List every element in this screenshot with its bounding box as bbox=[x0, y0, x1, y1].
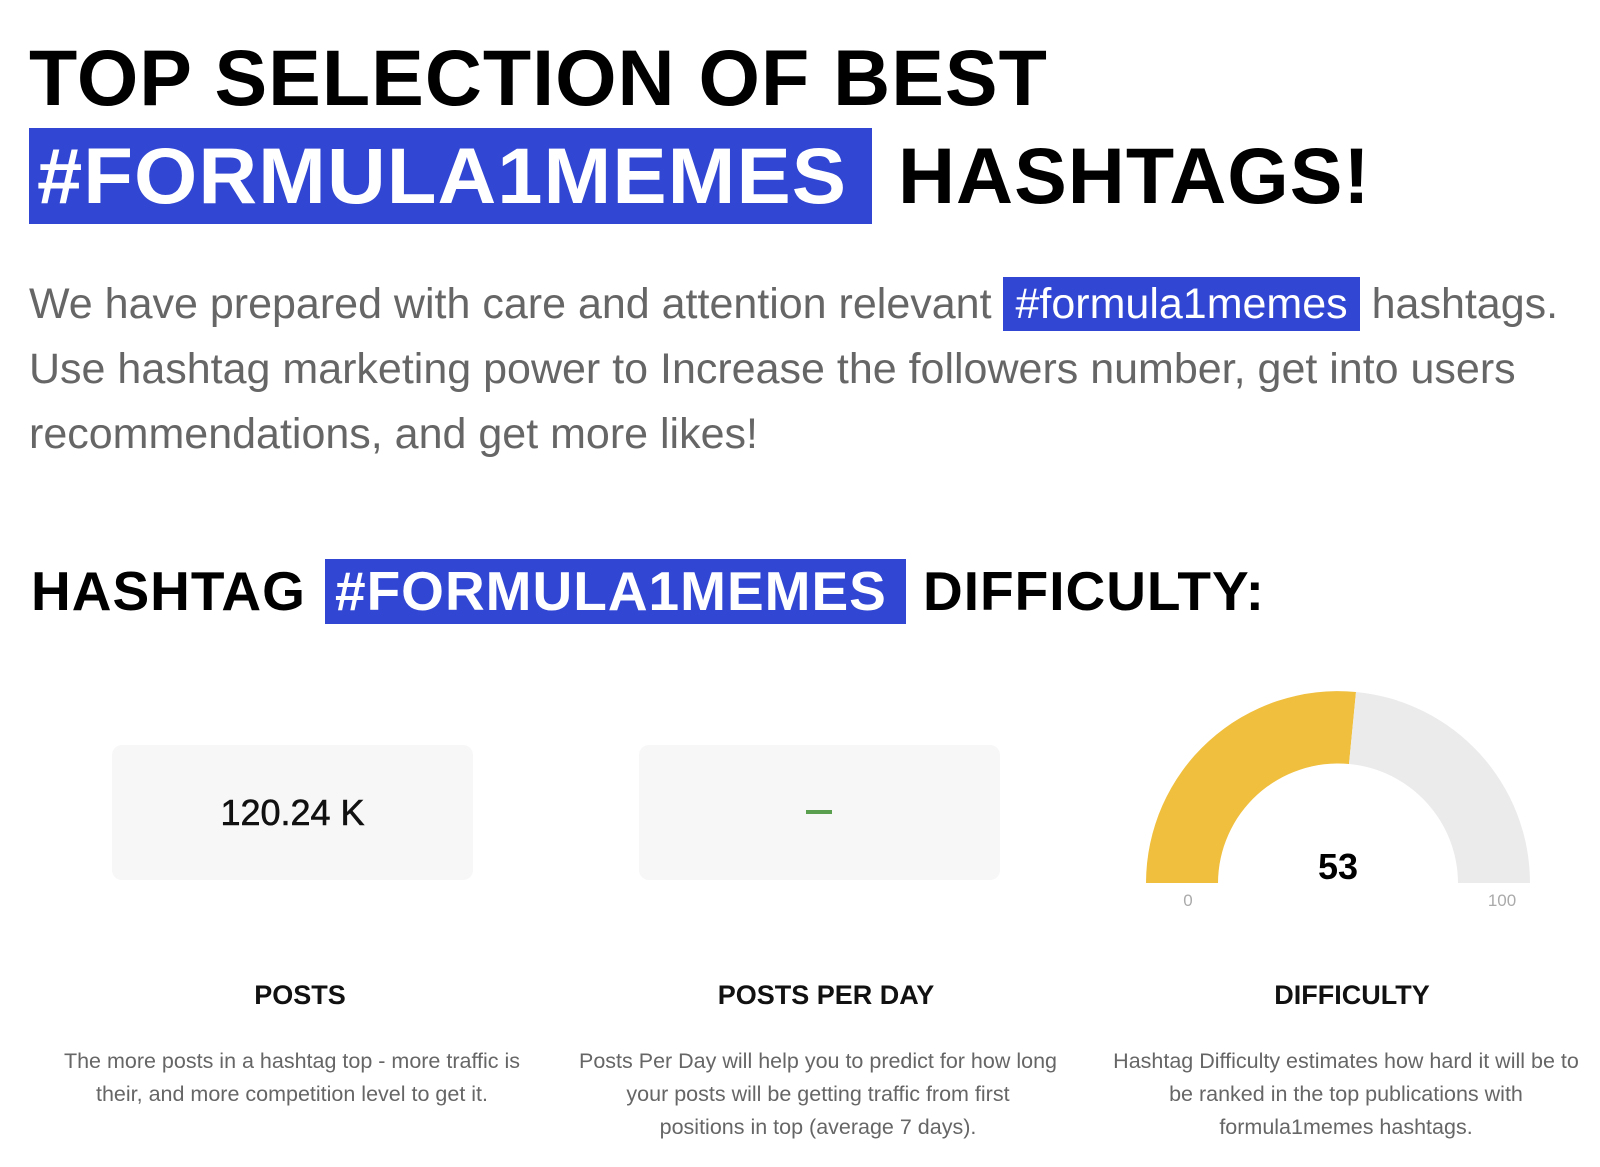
intro paragraph bbox=[29, 277, 1558, 458]
gauge: difficulty: 0 bbox=[1183, 891, 1193, 910]
desc: difficulty: formula1memes hashtags. bbox=[1219, 1115, 1473, 1139]
desc: posts per day: positions in top (average 7 days). bbox=[660, 1115, 976, 1139]
card: posts bbox=[112, 745, 473, 880]
title: #FORMULA1MEMES bbox=[37, 131, 847, 220]
desc: difficulty: be ranked in the top publications with bbox=[1169, 1082, 1523, 1106]
desc: posts: The more posts in a hashtag top - more traffic is bbox=[64, 1049, 520, 1073]
desc: difficulty: Hashtag Difficulty estimates how hard it will be to bbox=[1113, 1049, 1579, 1073]
label: posts per day: POSTS PER DAY bbox=[718, 980, 934, 1010]
label: difficulty: DIFFICULTY bbox=[1274, 980, 1430, 1010]
intro paragraph: recommendations, and get more likes! bbox=[29, 410, 758, 458]
difficulty heading bbox=[31, 559, 1265, 624]
card: posts per day bbox=[639, 745, 1000, 880]
label: posts: POSTS bbox=[254, 980, 346, 1010]
gauge: difficulty bbox=[1146, 691, 1530, 910]
desc: posts bbox=[64, 1049, 520, 1106]
title bbox=[29, 33, 1371, 224]
gauge: difficulty: 100 bbox=[1488, 891, 1516, 910]
dash bbox=[806, 810, 832, 814]
desc: posts: their, and more competition level to get it. bbox=[96, 1082, 488, 1106]
posts value: 120.24 K bbox=[220, 792, 365, 833]
desc: difficulty bbox=[1113, 1049, 1579, 1139]
gauge: difficulty: 53 bbox=[1318, 846, 1358, 887]
title: HASHTAGS! bbox=[898, 131, 1371, 220]
text: DIFFICULTY: bbox=[923, 560, 1265, 622]
intro paragraph: We have prepared with care and attention relevant #formula1memes hashtags. bbox=[29, 280, 1558, 328]
difficulty heading: HASHTAG bbox=[31, 560, 306, 622]
text: #FORMULA1MEMES bbox=[335, 560, 887, 622]
desc: posts per day: Posts Per Day will help you to predict for how long bbox=[579, 1049, 1057, 1073]
desc: posts per day: your posts will be getting traffic from first bbox=[626, 1082, 1010, 1106]
desc: posts per day bbox=[579, 1049, 1057, 1139]
intro paragraph: Use hashtag marketing power to Increase the followers number, get into users bbox=[29, 345, 1516, 393]
title: TOP SELECTION OF BEST bbox=[29, 33, 1048, 122]
